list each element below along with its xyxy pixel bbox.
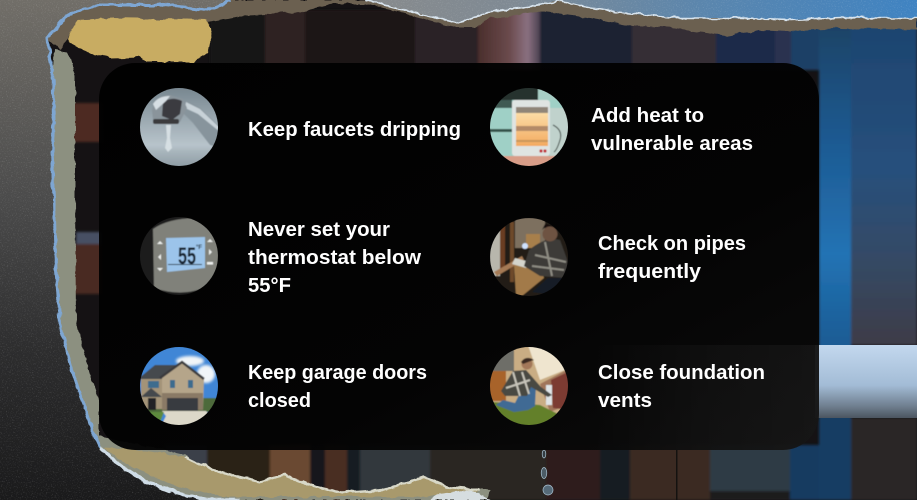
torn paper edge — [48, 0, 917, 50]
label: Keep faucets dripping — [248, 118, 461, 141]
label: Close foundation — [598, 361, 765, 384]
label — [248, 361, 427, 412]
icon: man inspecting pipes with flashlight — [488, 216, 570, 298]
label: Keep garage doors — [248, 361, 427, 384]
label: closed — [248, 389, 311, 412]
tip: add heat to vulnerable areas — [488, 86, 753, 168]
blue frost outline on left tear — [48, 1, 230, 447]
snow clump at bottom — [430, 490, 490, 500]
icon: man closing foundation vent — [490, 347, 568, 425]
label: frequently — [598, 260, 702, 283]
tip: keep garage doors closed — [138, 345, 427, 428]
label — [598, 232, 746, 283]
tip: never set thermostat below 55F — [138, 215, 421, 297]
icon: thermostat: 55 — [178, 243, 196, 270]
label: Never set your — [248, 218, 390, 241]
bottom insulation, tan with white fringe — [104, 448, 480, 497]
icon: thermostat — [138, 215, 220, 297]
frozen horizontal pipe — [815, 345, 917, 418]
frost and insulation along left tear — [52, 50, 490, 500]
label: thermostat below — [248, 246, 421, 269]
white frost outline on bottom tear — [100, 447, 240, 500]
icon: dripping faucet — [138, 86, 220, 168]
icon: space heater — [488, 86, 570, 168]
label: vulnerable areas — [591, 132, 753, 155]
label — [591, 104, 753, 155]
tip: check on pipes frequently — [488, 216, 746, 298]
label — [598, 361, 765, 412]
panel: dark rounded card — [99, 63, 819, 450]
yellow insulation at top left — [67, 18, 212, 62]
label: Check on pipes — [598, 232, 746, 255]
frost fringe along bottom insulation — [185, 457, 480, 493]
water droplets — [541, 450, 553, 495]
tip: close foundation vents — [488, 345, 765, 428]
white frost outline on top tear — [365, 0, 917, 23]
icon: house with garage — [140, 347, 218, 425]
label: 55°F — [248, 274, 291, 297]
label: vents — [598, 389, 652, 412]
icon: thermostat: °F — [196, 245, 202, 251]
label — [248, 218, 421, 297]
label: Add heat to — [591, 104, 704, 127]
tip: keep faucets dripping — [138, 86, 461, 168]
